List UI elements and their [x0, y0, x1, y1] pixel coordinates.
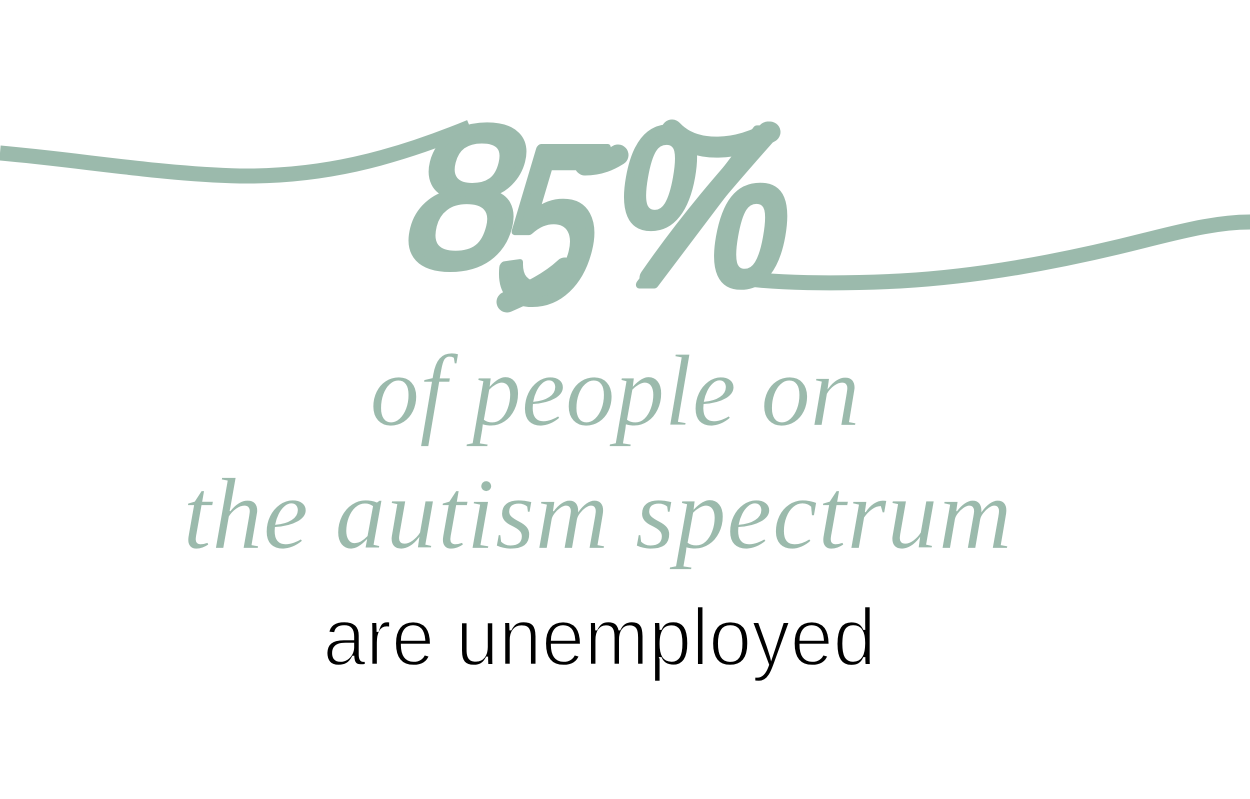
percent sign: % [596, 82, 816, 332]
script text line 1: of people on [370, 335, 860, 448]
script text line 2: the autism spectrum [183, 458, 1012, 571]
right ribbon line [730, 222, 1250, 283]
headline: 85% [385, 82, 816, 347]
left ribbon line [0, 127, 470, 176]
percent swash [507, 130, 770, 302]
digit 5: 5 [476, 101, 633, 347]
closing text: are unemployed [323, 592, 876, 683]
digit 8: 8 [385, 86, 552, 309]
